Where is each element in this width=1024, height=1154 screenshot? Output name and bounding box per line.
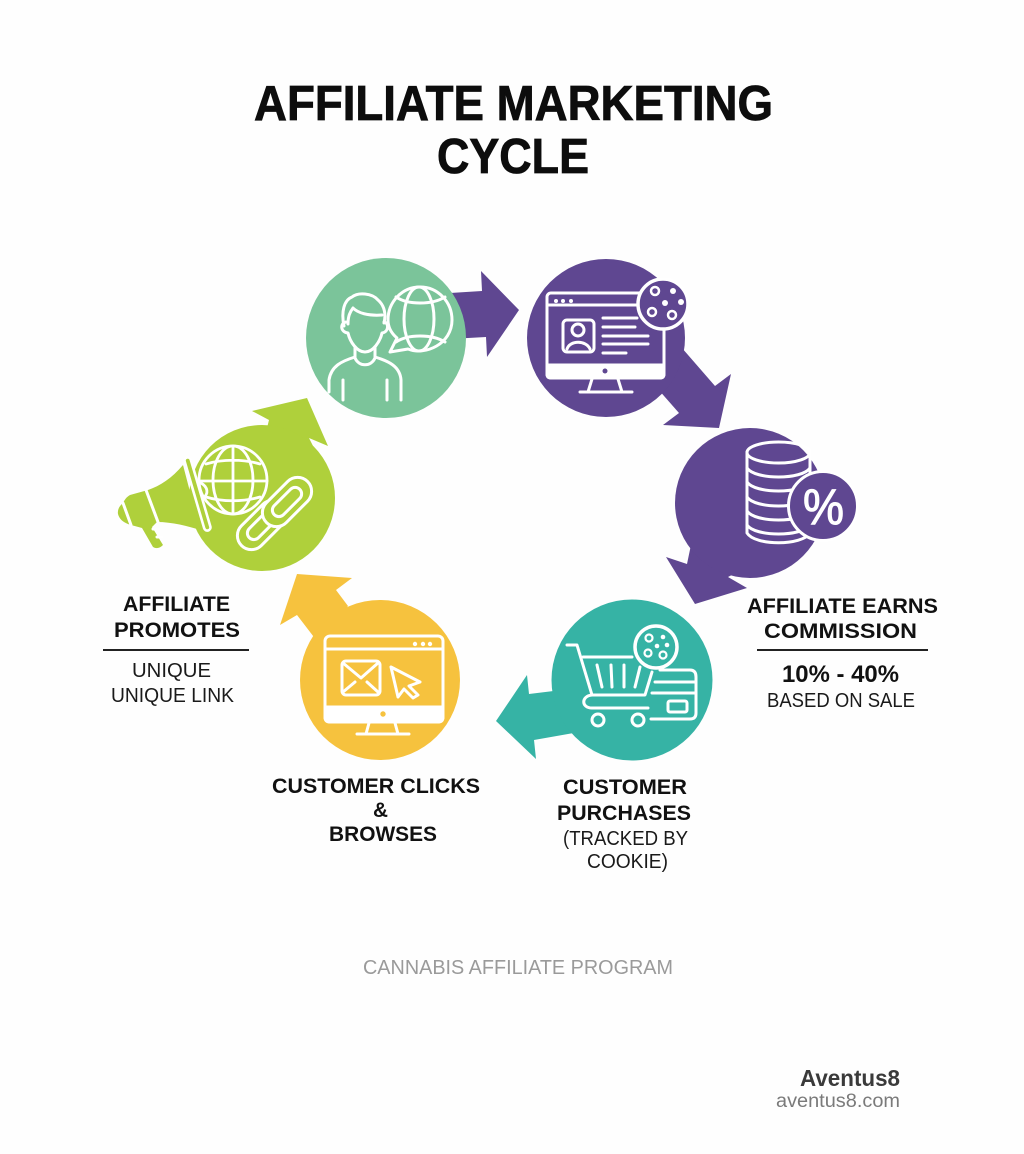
branding: Aventus8: Aventus8: [800, 1065, 900, 1091]
label: customer purchases: [557, 775, 691, 873]
arrow: website step to commission step: [650, 340, 731, 428]
purple circle: [527, 259, 685, 417]
arrow: purchase step to clicks step: [496, 675, 585, 759]
yellow circle: [300, 600, 460, 760]
title: [254, 77, 773, 184]
label: customer purchases: PURCHASES: [557, 801, 691, 825]
branding: Aventus8: [776, 1065, 900, 1112]
icon: globe: [199, 446, 267, 514]
step: website with cookie: [527, 259, 688, 417]
title: AFFILIATE MARKETING: [254, 77, 773, 131]
label: affiliate promotes: PROMOTES: [114, 618, 240, 642]
step: affiliate promotes: [118, 425, 335, 571]
label: customer clicks and browses: CUSTOMER CLICKS: [272, 774, 480, 798]
green circle: [306, 258, 466, 418]
icon: credit card: [651, 670, 696, 719]
label: customer purchases: (TRACKED BY: [563, 827, 688, 850]
caption: program name: CANNABIS AFFILIATE PROGRAM: [363, 957, 673, 979]
icon: database coins: [747, 442, 810, 543]
arrow: promotes step to green step: [252, 398, 328, 460]
icon: person: [329, 294, 401, 400]
arrow: clicks step to promotes step: [280, 574, 352, 645]
label: affiliate earns commission: BASED ON SALE: [767, 689, 915, 712]
icon: cookie: [635, 626, 677, 668]
icon: monitor with email and cursor: [325, 636, 443, 734]
label: customer clicks and browses: BROWSES: [329, 822, 437, 846]
step: commission: [675, 428, 858, 578]
lime circle: [189, 425, 335, 571]
icon: percent badge: [788, 472, 858, 540]
arrow: commission step to purchase step: [666, 540, 760, 604]
arrow: green step to website step: [450, 271, 519, 357]
icon: globe speech bubble: [388, 287, 452, 352]
icon: megaphone: [118, 457, 211, 548]
label: affiliate earns commission: [747, 594, 938, 712]
label: affiliate earns commission: 10% - 40%: [782, 661, 899, 688]
label: customer purchases: CUSTOMER: [563, 775, 687, 799]
purple circle: [675, 428, 825, 578]
label: affiliate promotes: AFFILIATE: [123, 592, 230, 616]
label: affiliate earns commission: COMMISSION: [764, 619, 917, 643]
title: CYCLE: [437, 130, 589, 184]
label: affiliate promotes: [103, 592, 249, 707]
label: customer clicks and browses: &: [373, 798, 388, 822]
icon: chain link: [232, 472, 317, 555]
step: customer clicks: [300, 600, 460, 760]
step: customer purchases: [552, 600, 712, 760]
label: customer purchases: COOKIE): [587, 850, 668, 873]
label: affiliate promotes: UNIQUE: [132, 659, 211, 682]
icon: monitor with profile: [547, 293, 664, 392]
label: affiliate earns commission: AFFILIATE EARNS: [747, 594, 938, 618]
teal circle: [552, 600, 712, 760]
branding: Aventus8: aventus8.com: [776, 1091, 900, 1112]
icon: percent badge: %: [803, 479, 844, 535]
label: customer clicks and browses: [272, 774, 480, 846]
icon: cookie: [638, 279, 688, 329]
label: affiliate promotes: UNIQUE LINK: [111, 684, 234, 707]
icon: shopping cart: [567, 645, 652, 726]
step: affiliate person and globe: [306, 258, 466, 418]
